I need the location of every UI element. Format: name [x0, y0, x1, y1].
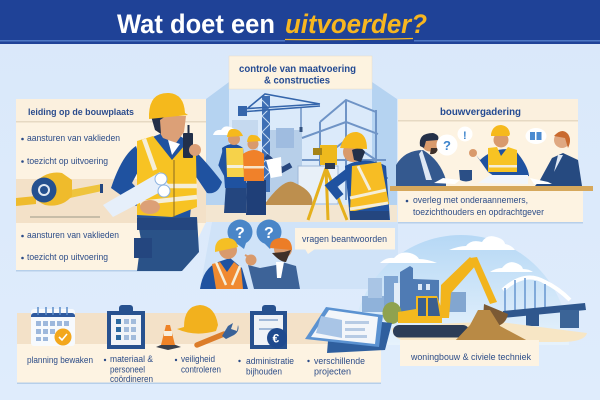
icon: clipboard euro: € [272, 332, 280, 346]
dirt pile [264, 182, 312, 205]
label: controle van maatvoering [229, 56, 372, 89]
header banner [0, 0, 600, 44]
person centre [469, 125, 529, 180]
speech bubbles [436, 126, 546, 156]
vest [137, 136, 197, 217]
heading: bouwvergadering [440, 107, 521, 118]
text: overleg: overleg met onderaannemers, [413, 195, 528, 205]
icon: calendar [31, 307, 75, 346]
icon: blueprints [305, 307, 392, 353]
speech label [295, 228, 395, 254]
heading: leiding op de bouwplaats [28, 107, 134, 118]
bullet list bottom: aansturen van vaklieden [27, 230, 119, 240]
icon: clipboard euro [250, 305, 287, 349]
icon: safety cone [156, 325, 181, 350]
label [400, 340, 539, 366]
boom [440, 257, 477, 318]
text: administratie: administratie [246, 356, 294, 366]
tripod [308, 168, 347, 220]
text: overleg [406, 195, 544, 217]
worker left [200, 238, 248, 289]
text: verschillende projecten: verschillende [314, 356, 365, 366]
label: controle van maatvoering: & constructies [264, 76, 330, 86]
text: administratie: bijhouden [246, 366, 282, 376]
label: woningbouw & civiele techniek [410, 352, 531, 362]
cloud [213, 126, 241, 135]
text: veiligheid: controleren [181, 364, 221, 374]
bucket [483, 304, 508, 327]
icon: wrench [197, 323, 238, 345]
stick [470, 257, 497, 304]
blue shirt and arms [137, 132, 197, 217]
blueprint rolls [103, 172, 170, 217]
bush [382, 302, 402, 324]
sky dome [353, 235, 569, 345]
dirt pile [453, 310, 528, 343]
panel: construction scene backdrop [206, 82, 397, 222]
main worker with radio [103, 93, 222, 271]
label: controle van maatvoering: controle van maatvoering [239, 64, 356, 75]
city skyline [362, 266, 466, 313]
title: Wat doet een [117, 9, 275, 39]
bullet list top: toezicht op uitvoering [27, 156, 108, 166]
bullet list top [21, 133, 120, 166]
text: materiaal [104, 354, 153, 384]
panel: bouwvergadering [390, 99, 593, 224]
bullet list bottom: toezicht op uitvoering [27, 252, 108, 262]
person right [535, 131, 582, 186]
text: veiligheid: veiligheid [181, 354, 215, 364]
worker with yellow vest [221, 129, 247, 213]
hard hat [149, 93, 188, 119]
worker with orange vest [243, 135, 291, 215]
text: materiaal: coördineren [110, 374, 153, 384]
text: verschillende projecten [307, 356, 365, 376]
theodolite [313, 145, 337, 169]
text: administratie [238, 356, 294, 376]
head [156, 116, 186, 143]
surveyor with tripod [308, 132, 390, 220]
text: materiaal: personeel [110, 364, 145, 374]
trousers [137, 217, 199, 271]
excavator [393, 257, 508, 338]
radio [183, 125, 193, 158]
worker right [245, 238, 300, 289]
text: verschillende projecten: projecten [314, 366, 351, 376]
question bubbles: ? [264, 225, 274, 242]
icon: tape measure [16, 173, 103, 218]
panel: leiding op de bouwplaats [16, 99, 206, 272]
icon: clipboard checklist [107, 305, 145, 349]
bullet list bottom [21, 230, 119, 262]
steel frame building [298, 100, 388, 204]
panel: taken strook [17, 305, 381, 384]
text: materiaal: materiaal & [110, 354, 153, 364]
speech bubbles: ! [463, 130, 467, 142]
question bubbles: ? [235, 225, 245, 242]
question bubbles [228, 220, 282, 249]
crane [238, 94, 320, 192]
worker pair with plan [221, 129, 291, 215]
tracks [393, 325, 469, 338]
icon: hard hat [177, 305, 218, 334]
title accent: uitvoerder? [285, 9, 427, 39]
text: veiligheid [175, 354, 221, 374]
clouds [380, 236, 533, 272]
ground [392, 322, 587, 342]
text: overleg: toezichthouders en opdrachtgever [413, 207, 544, 217]
text: planning bewaken: planning bewaken [27, 355, 93, 365]
body [398, 296, 442, 323]
panel: woningbouw en civiele techniek [353, 235, 587, 366]
bridge [503, 278, 586, 328]
person left [396, 133, 446, 186]
bullet list top: aansturen van vaklieden [27, 133, 120, 143]
panel: vragen beantwoorden [200, 220, 398, 289]
speech label: vragen beantwoorden [302, 234, 387, 244]
speech bubbles: ? [443, 138, 451, 153]
table [390, 170, 593, 191]
